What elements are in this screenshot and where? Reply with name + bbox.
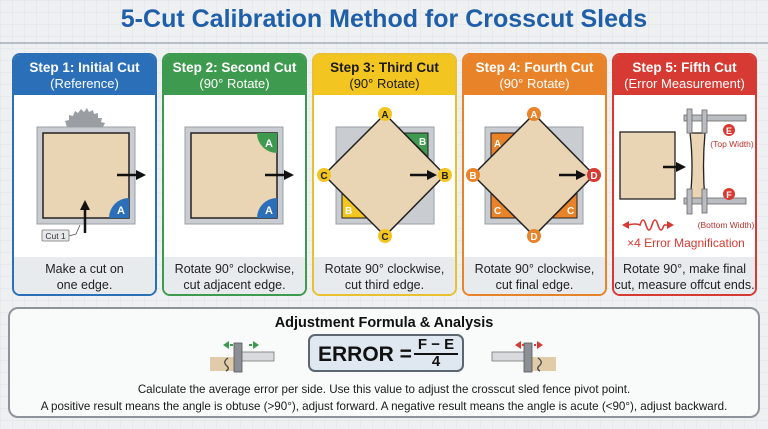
panel: adjustment formula [8, 307, 760, 418]
footer text: step 3 [314, 257, 455, 298]
panel: step 4 [462, 53, 607, 296]
diagram: step 4: C [567, 206, 574, 217]
icon: fence adjust forward [210, 341, 274, 372]
diagram: step 4: D [530, 232, 538, 243]
explanation text: Calculate the average error per side. Use this value to adjust the crosscut sled fence pivot point. [138, 383, 630, 396]
diagram: step 4: D [590, 171, 598, 182]
footer text: step 4: cut final edge. [496, 278, 573, 292]
explanation text [40, 383, 727, 413]
footer text: step 4 [464, 257, 605, 298]
formula box: 4 [432, 353, 440, 370]
diagram: step 3: B [419, 137, 426, 148]
footer text: step 5: cut, measure offcut ends. [614, 278, 755, 292]
formula box [308, 334, 464, 372]
header: step 5: Step 5: Fifth Cut [632, 60, 737, 75]
header: step 1: Step 1: Initial Cut [29, 60, 140, 75]
diagram: step 5: E [726, 126, 732, 136]
diagram: step 2: A [265, 138, 273, 150]
heading: adjustment formula: Adjustment Formula & Analysis [275, 315, 493, 331]
diagram: step 5: (Bottom Width) [698, 220, 755, 230]
icon: fence adjust backward [492, 341, 556, 372]
header: step 4: (90° Rotate) [499, 76, 570, 91]
explanation text: A positive result means the angle is obtuse (>90°), adjust forward. A negative result means the angle is acute (<90°), adjust backward. [41, 400, 727, 413]
header: step 5 [614, 55, 755, 95]
diagram: step 5: F [726, 190, 732, 200]
footer text: step 4: Rotate 90° clockwise, [475, 262, 594, 276]
diagram: step 1: Cut 1 [45, 231, 66, 241]
diagram: step 2 [184, 126, 294, 224]
header: step 2: Step 2: Second Cut [173, 60, 296, 75]
header: step 2: (90° Rotate) [199, 76, 270, 91]
header: step 3 [314, 55, 455, 95]
footer text: step 2 [164, 257, 305, 298]
header: step 3: Step 3: Third Cut [330, 60, 439, 75]
diagram: step 2: A [265, 205, 273, 217]
diagram: step 4: C [494, 206, 501, 217]
diagram: step 3: C [320, 171, 328, 182]
panel: step 3 [312, 53, 457, 296]
diagram: step 1: A [117, 205, 125, 217]
header: step 2 [164, 55, 305, 95]
footer text: step 3: Rotate 90° clockwise, [325, 262, 444, 276]
diagram: step 1 [36, 108, 146, 242]
diagram: step 3: B [345, 206, 352, 217]
diagram: step 5: (Top Width) [710, 139, 754, 149]
title: 5-Cut Calibration Method for Crosscut Sleds [121, 5, 647, 33]
header: step 3: (90° Rotate) [349, 76, 420, 91]
panel: step 5 [612, 53, 757, 296]
diagram: step 3 [317, 107, 452, 243]
diagram: step 3: A [381, 110, 389, 121]
diagram: step 4: A [530, 110, 538, 121]
diagram: step 3: C [381, 232, 389, 243]
header: step 1: (Reference) [50, 76, 119, 91]
panel: step 1 [12, 53, 157, 296]
header: step 5: (Error Measurement) [624, 76, 745, 91]
header: step 4 [464, 55, 605, 95]
diagram: step 5: ×4 Error Magnification [627, 236, 745, 250]
footer text: step 1 [14, 257, 155, 298]
formula box: ERROR = [318, 343, 412, 366]
diagram: step 4 [466, 107, 601, 243]
footer text: step 2: Rotate 90° clockwise, [175, 262, 294, 276]
panel: step 2 [162, 53, 307, 296]
footer text: step 1: one edge. [57, 278, 112, 292]
footer text: step 1: Make a cut on [45, 262, 124, 276]
footer text: step 3: cut third edge. [345, 278, 424, 292]
diagram: step 4: B [469, 171, 477, 182]
formula box: F − E [418, 336, 454, 353]
diagram: step 4: A [494, 139, 501, 150]
header: step 4: Step 4: Fourth Cut [476, 60, 593, 75]
footer text: step 5: Rotate 90°, make final [623, 262, 746, 276]
header: step 1 [14, 55, 155, 95]
footer text: step 2: cut adjacent edge. [183, 278, 286, 292]
diagram: step 3: B [441, 171, 449, 182]
diagram: step 5 [619, 108, 755, 250]
footer text: step 5 [614, 257, 755, 298]
